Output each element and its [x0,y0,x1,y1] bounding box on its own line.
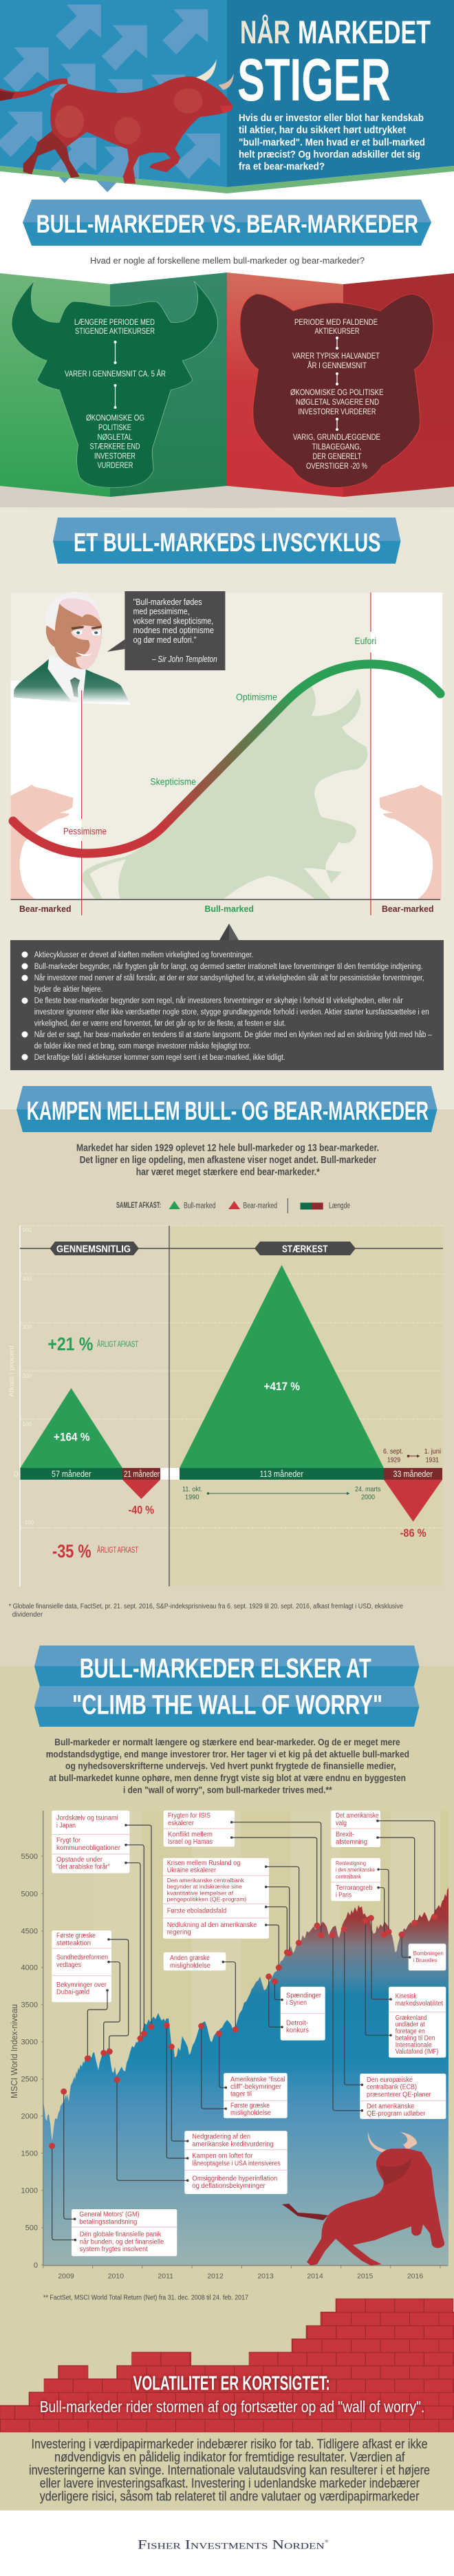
x axis labels: 2009 [58,2272,74,2281]
callout: Japan, municipal bonds, Arab spring: kommuneobligationer [56,1844,121,1852]
baseline [11,899,440,900]
panel: key points: de falder ikke med et brag, som mange investorer måske fejlagtigt tror. [34,1042,251,1050]
callout: rate hike, Paris: i Paris [336,1892,352,1899]
curve labels: Optimisme [236,691,277,702]
heading ribbon: battle [17,1086,437,1132]
bull facts: NØGLETAL [98,434,133,442]
callout: Syria, Detroit: i Syrien [286,1999,307,2007]
callout: Greek aid, healthcare reform, Dubai debt [52,1930,111,2002]
bear facts: AKTIEKURSER [315,328,359,336]
quote bubble: – Sir John Templeton [151,654,217,664]
callout: GM, global panic: Den globale finansielle panik [80,2231,162,2239]
callout: Greek aid, healthcare reform, Dubai debt: Dubai-gæld [56,1989,89,1997]
footnote [9,1602,403,1619]
chart legend: SAMLET AFKAST: [116,1202,161,1210]
panel: key points: byder de aktier højere. [34,986,102,994]
footer background [0,2511,454,2576]
callout: Japan, municipal bonds, Arab spring: Jordskælv og tsunami [56,1815,118,1822]
callout: Japan, municipal bonds, Arab spring: Opstande under [56,1856,103,1864]
hero banner [0,0,454,193]
event dots [49,1913,437,2149]
callout: ISIS, Israel and Hamas: Frygten for ISIS [168,1812,210,1820]
y axis labels: 3500 [21,2001,38,2010]
annual return: bear: -35 % [52,1541,91,1562]
bear silhouette left [11,785,73,900]
callout: ISIS, Israel and Hamas [164,1811,235,1846]
heading ribbon: bull vs bear [23,200,431,246]
duration bars: 57 måneder [52,1469,91,1479]
callout: rate hike, Paris: i den amerikanske [336,1866,375,1873]
callout: US election, Brexit: valg [336,1820,347,1827]
red bull illustration [0,59,234,184]
callout: China, Greece IMF: markedsvolatilitet [396,2000,443,2008]
wall of worry intro: og nyhedsoverskrifterne undervejs. Ved hvert punkt frygtede de finansielle medier, [65,1761,396,1771]
callout: Russia, QE taper, Ebola, shutdown: Første eboladødsfald [167,1907,226,1915]
bull facts: STÆRKERE END [89,443,140,451]
strongest bull triangle [180,1265,384,1468]
callout: Russia, QE taper, Ebola, shutdown: Krisen mellem Rusland og [167,1860,240,1867]
panel: bull market [0,273,227,497]
wall of worry intro: at bull-markedet kunne ophøre, men denne frygt viste sig blot at være endnu en byggesten [49,1773,406,1783]
callout: rate hike, Paris: centralbank [336,1873,362,1880]
strongest bull triangle: +417 % [263,1380,300,1393]
title: STIGER [237,47,391,114]
intro text: til aktier, har du sikkert hørt udtrykket [239,124,406,136]
bear triangles: -40 % [128,1503,154,1517]
background arrows [0,5,220,192]
panel: key points: Det kraftige fald i aktiekurser kommer som regel sent i et bear-marked, ikke tidligt. [34,1054,285,1062]
y axis title: MSCI World Index-niveau [9,2004,19,2098]
callout: China, Greece IMF: Grækenland [396,2014,427,2022]
wall of worry intro: Bull-markeder er normalt længere og stærkere end bear-markeder. Og de er meget mere [54,1737,400,1747]
callout: US election, Brexit [331,1811,380,1847]
curve labels [63,635,376,837]
callout: ECB QE, US QE ends: QE-program udløber [367,2110,426,2118]
callout: fiscal cliff, first Greek default: misligholdelse [230,2109,271,2117]
panel: bear market [227,273,454,497]
logo: Fisher Investments Norden: ® [325,2539,329,2544]
wall of worry intro: modstandsdygtige, end mange investorer tror. Her tager vi et kig på det aktuelle bull-marked [46,1749,409,1759]
callout: ECB QE, US QE ends: centralbank (ECB) [367,2084,417,2091]
quote bubble: og dør med eufori." [133,635,197,645]
bear facts: ÅR I GENNEMSNIT [307,361,367,370]
heading ribbon: life cycle [53,518,400,564]
bear facts: PERIODE MED FALDENDE [294,319,378,327]
y axis: 200 [22,1373,32,1379]
callout: Russia, QE taper, Ebola, shutdown: Nedlukning af den amerikanske [167,1922,257,1929]
quote bubble [107,591,225,670]
callout: rate hike, Paris [331,1858,380,1901]
bear facts: NØGLETAL SVAGERE END [296,398,379,407]
dates: strongest bear [383,1447,441,1465]
callout: Syria, Detroit: Detroit- [286,2019,308,2027]
callout: Japan, municipal bonds, Arab spring: Frygt for [56,1837,81,1844]
callout: Russia, QE taper, Ebola, shutdown: kvantitative lempelser af [167,1889,234,1896]
axes [43,1811,448,2266]
bull facts: VURDERER [98,462,133,470]
x axis labels: 2012 [207,2272,224,2281]
callout: China, Greece IMF [389,1987,446,2058]
callout: ECB QE, US QE ends: Den europæiske [367,2076,413,2084]
callout: Syria, Detroit: konkurs [286,2027,309,2034]
callout: fiscal cliff, first Greek default [224,2073,288,2118]
footnote: dividender [12,1610,43,1619]
callout: downgrade, debt ceiling, hyperinflation: Kampen om loftet for [192,2153,253,2160]
callout: downgrade, debt ceiling, hyperinflation: låneoptagelse i USA intensiveres [192,2159,281,2167]
callout: Russia, QE taper, Ebola, shutdown [163,1858,269,1939]
duration bars: 113 måneder [260,1469,303,1479]
chart: bull vs bear returns [8,1226,443,1586]
bear triangles [122,1480,442,1540]
wall of worry intro [46,1737,409,1795]
section background: wall of worry [0,1666,454,2511]
callout: Greek aid, healthcare reform, Dubai debt: støtteaktion [56,1940,91,1948]
bull facts: INVESTORER [94,453,136,461]
volatility message: VOLATILITET ER KORTSIGTET: [133,2372,330,2394]
callout: ECB QE, US QE ends: Det amerikanske [367,2103,415,2110]
tag: average: GENNEMSNITLIG [56,1243,131,1255]
callout: Japan, municipal bonds, Arab spring: i Japan [56,1822,76,1830]
bear facts: DER GENERELT [312,453,362,461]
callout: GM, global panic [72,2209,177,2256]
logo: Fisher Investments Norden: Fisher Investments Norden [138,2538,280,2552]
callout: US election, Brexit: Brexit- [336,1831,354,1839]
callout: GM, global panic: system frygtes insolvent [80,2246,148,2253]
bear facts: TILBAGEGANG, [312,443,362,451]
callout: China, Greece IMF: Valutafond (IMF) [396,2048,438,2056]
bull facts: STIGENDE AKTIEKURSER [75,328,155,336]
intro text: fra et bear-marked? [239,161,325,172]
callout: rate hike, Paris: Terrorangreb [336,1884,373,1892]
bear facts: VARIG, GRUNDLÆGGENDE [293,434,380,442]
callout: Japan, municipal bonds, Arab spring: "det arabiske forår" [56,1863,110,1871]
phase names [19,904,433,914]
y axis labels: 3000 [21,2039,38,2047]
annual return: bull: ÅRLIGT AFKAST [97,1340,138,1349]
dates: strongest bull [182,1485,381,1502]
bear facts: VARER TYPISK HALVANDET [292,352,380,361]
bear facts [290,319,384,471]
callout: Greek aid, healthcare reform, Dubai debt: Sundhedsreformen [56,1954,108,1961]
chart legend: Bull-marked [184,1202,216,1210]
callout: Russia, QE taper, Ebola, shutdown: regering [167,1929,191,1937]
callout: Brussels: Bombningen [413,1950,444,1957]
chart legend: Bear-marked [244,1202,277,1210]
bear facts: OVERSTIGER -20 % [306,462,367,471]
y axis labels: 1000 [21,2187,38,2195]
duration bars [21,1468,442,1480]
callout: China, Greece IMF: betaling til Den [396,2034,435,2042]
y axis labels: 4500 [21,1928,38,1936]
callout: Russia, QE taper, Ebola, shutdown: Den amerikanske centralbank [167,1877,244,1884]
quote bubble: vokser med skepticisme, [133,615,213,626]
duration bars: 21 måneder [124,1469,160,1479]
callout: downgrade, debt ceiling, hyperinflation: og deflationsbekymringer [192,2182,266,2190]
callout: China, Greece IMF: Kinesisk [396,1992,418,2000]
curve labels: Pessimisme [63,826,107,837]
y axis labels: 2000 [21,2113,38,2121]
risk disclaimer [29,2436,430,2504]
quote bubble: "Bull-markeder fødes [133,597,202,607]
callout: Russia, QE taper, Ebola, shutdown: pengepolitikken (QE-program) [167,1895,246,1902]
callout: US election, Brexit: Det amerikanske [336,1812,379,1820]
callout: Brussels: i Bruxelles [413,1957,437,1963]
tag: strongest: STÆRKEST [282,1243,327,1255]
phase names: Bear-marked [19,904,72,914]
x axis labels: 2016 [407,2272,423,2281]
volatility message [40,2372,424,2416]
y axis labels: 4000 [21,1964,38,1972]
bull facts [65,319,166,470]
y axis labels: 0 [34,2261,38,2270]
bear facts: ØKONOMISKE OG POLITISKE [290,389,384,397]
intro text: helt præcist? Og hvordan adskiller det sig [239,149,420,160]
annual return: bear [52,1541,138,1562]
icon: bull head [12,280,218,487]
bull facts: VARER I GENNEMSNIT CA. 5 ÅR [65,370,166,379]
bull facts: LÆNGERE PERIODE MED [74,319,155,327]
green ground band [0,166,454,193]
dates: strongest bull: 2000 [361,1493,375,1502]
duration bars: 33 måneder [393,1469,433,1479]
callout: GM, global panic: når bunden, og det finansielle [80,2237,164,2246]
dates: strongest bear: 6. sept. [383,1447,403,1456]
quote bubble: med pessimisme, [133,606,190,617]
bull facts: ØKONOMISKE OG [86,414,144,423]
callout: downgrade, debt ceiling, hyperinflation: amerikanske kreditvurdering [192,2140,274,2148]
x axis labels: 2011 [158,2272,173,2281]
y axis labels: 2500 [21,2076,38,2084]
callout: ECB QE, US QE ends [360,2074,446,2119]
y axis: 300 [22,1324,32,1330]
event connectors [52,1821,435,2240]
callout: downgrade, debt ceiling, hyperinflation [184,2131,288,2194]
red bull on chart [282,2131,444,2266]
callout: Japan, municipal bonds, Arab spring [52,1811,129,1873]
callout: ISIS, Israel and Hamas: Konflikt mellem [168,1831,213,1839]
battle intro: Markedet har siden 1929 oplevet 12 hele bull-markeder og 13 bear-markeder. [76,1142,379,1153]
x axis labels: 2010 [108,2272,124,2281]
bear silhouette right [379,785,442,900]
x axis labels: 2015 [357,2272,374,2281]
callout: fiscal cliff, first Greek default: Amerikanske "fiscal [230,2076,285,2083]
comparison question: Hvad er nogle af forskellene mellem bull-markeder og bear-markeder? [90,255,365,266]
section background [0,485,454,1109]
bull facts: POLITISKE [98,424,131,432]
dates: strongest bear: 1. juni [424,1447,441,1456]
average bull triangle: +164 % [54,1430,89,1444]
panel: key points: virkelighed, der er værre end forventet, før det går op for de fleste, at festen er slut. [34,1020,286,1028]
callout: downgrade, debt ceiling, hyperinflation: Nedgradering af den [192,2133,250,2141]
callout: China, Greece IMF: undlader at [396,2021,425,2029]
bear facts: INVESTORER VURDERER [299,408,376,416]
callout: GM, global panic: General Motors' (GM) [79,2211,140,2219]
callout: ISIS, Israel and Hamas: Israel og Hamas [168,1838,213,1846]
y axis labels: 1500 [21,2150,38,2158]
curve labels: Skepticisme [150,776,196,787]
y axis: 500 [22,1227,32,1233]
section background: battle [0,1109,454,1666]
year bands [93,1811,440,2265]
x axis labels [58,2272,423,2281]
callout: downgrade, debt ceiling, hyperinflation: Omsiggribende hyperinflation [192,2175,277,2182]
portrait: Sir John Templeton [14,592,131,705]
panel: key points: De fleste bear-markeder begynder som regel, når investorers forventninger er skyhøje i forhold til virkeligheden, eller når [34,997,403,1005]
dates: strongest bear: 1931 [426,1456,439,1465]
bear triangles: -86 % [400,1526,426,1540]
callout: Greek aid, healthcare reform, Dubai debt: vedtages [56,1961,81,1969]
callout: Russia, QE taper, Ebola, shutdown: begynder at indskrænke sine [167,1883,242,1890]
phase names: Bull-marked [205,904,254,914]
chart: MSCI World index [9,1811,448,2281]
callout: US election, Brexit: afstemning [336,1838,367,1846]
intro text: Hvis du er investor eller blot har kendskab [239,112,424,124]
y axis: -100 [23,1520,34,1526]
average bull triangle [21,1388,122,1468]
chart legend: Længde [329,1202,350,1210]
quote bubble: modnes med optimisme [133,625,214,635]
wall of worry intro: i den "wall of worry", som bull-markeder trives med.** [123,1785,332,1795]
connector end points [74,1820,411,2241]
title [237,14,431,114]
annual return: bull [47,1334,138,1354]
y axis labels: 500 [25,2224,38,2233]
dates: strongest bear: 1929 [387,1456,400,1465]
callout: Syria, Detroit: Spændinger [286,1992,322,1999]
panel: key points [10,924,444,1070]
dates: strongest bull: 1990 [185,1493,199,1502]
phase names: Bear-marked [382,904,433,914]
callout: second Greek default: Anden græske [170,1955,210,1962]
callout: second Greek default [164,1952,226,1970]
callout: second Greek default: misligholdelse [170,1962,210,1970]
callout: Russia, QE taper, Ebola, shutdown: Ukraine eskalerer [167,1867,217,1875]
y axis [8,1227,34,1526]
phase markers [82,593,371,915]
tag: strongest [255,1242,356,1255]
panel: key points: Aktiecyklusser er drevet af kløften mellem virkelighed og forventninger. [34,951,253,959]
y axis labels [21,1853,38,2270]
y axis labels: 5000 [21,1891,38,1899]
icon: bear head [240,294,433,487]
battle intro: har været meget stærkere end bear-markeder.* [136,1166,320,1178]
source note: ** FactSet, MSCI World Total Return (Net) fra 31. dec. 2008 til 24. feb. 2017 [43,2294,248,2302]
callout: Greek aid, healthcare reform, Dubai debt: Bekymringer over [56,1981,107,1989]
y axis: 400 [22,1276,32,1282]
dates: strongest bull: 24. marts [355,1485,381,1493]
callout: ISIS, Israel and Hamas: eskalerer [168,1820,195,1827]
callout: China, Greece IMF: foretage en [396,2028,425,2036]
brick wall [0,2299,454,2432]
chart legend [116,1198,350,1213]
callout: Syria, Detroit [281,1987,325,2041]
panel: bull market life cycle chart [11,591,442,915]
x axis labels: 2014 [307,2272,323,2281]
callout: fiscal cliff, first Greek default: cliff"-bekymringer [230,2083,282,2091]
battle intro [76,1142,379,1178]
y axis: 0 [14,1469,19,1479]
annual return: bear: ÅRLIGT AFKAST [97,1546,138,1555]
intro text [239,112,425,172]
dates: strongest bull: 11. okt. [182,1485,202,1493]
callout: Greek aid, healthcare reform, Dubai debt: Første græske [56,1933,96,1940]
callout: China, Greece IMF: Internationale [396,2041,432,2049]
title: NÅR [240,14,290,50]
callout: ECB QE, US QE ends: præsenterer QE-planer [367,2091,431,2099]
chevron shadow [0,482,454,508]
callout: fiscal cliff, first Greek default: tager til [230,2091,252,2098]
annual return: bull: +21 % [47,1334,93,1354]
callout: fiscal cliff, first Greek default: Første græske [230,2102,270,2109]
x axis labels: 2013 [257,2272,274,2281]
bull silhouette [83,686,367,900]
curve labels: Eufori [355,635,376,646]
heading ribbon: wall of worry [34,1646,420,1727]
callout: GM, global panic: betalingsstandsning [79,2218,137,2226]
y axis labels: 5500 [21,1853,38,1861]
market cycle curve [13,664,440,853]
callout: rate hike, Paris: Rentestigning [336,1860,366,1866]
y axis: 100 [22,1421,32,1427]
callout: Brussels [409,1944,446,1970]
intro text: "bull-marked". Men hvad er et bull-marked [239,136,425,149]
index area [43,1888,448,2265]
battle intro: Det ligner en lige opdeling, men afkastene viser noget andet. Bull-markeder [80,1154,376,1166]
y axis: Afkast i procent [8,1345,16,1397]
